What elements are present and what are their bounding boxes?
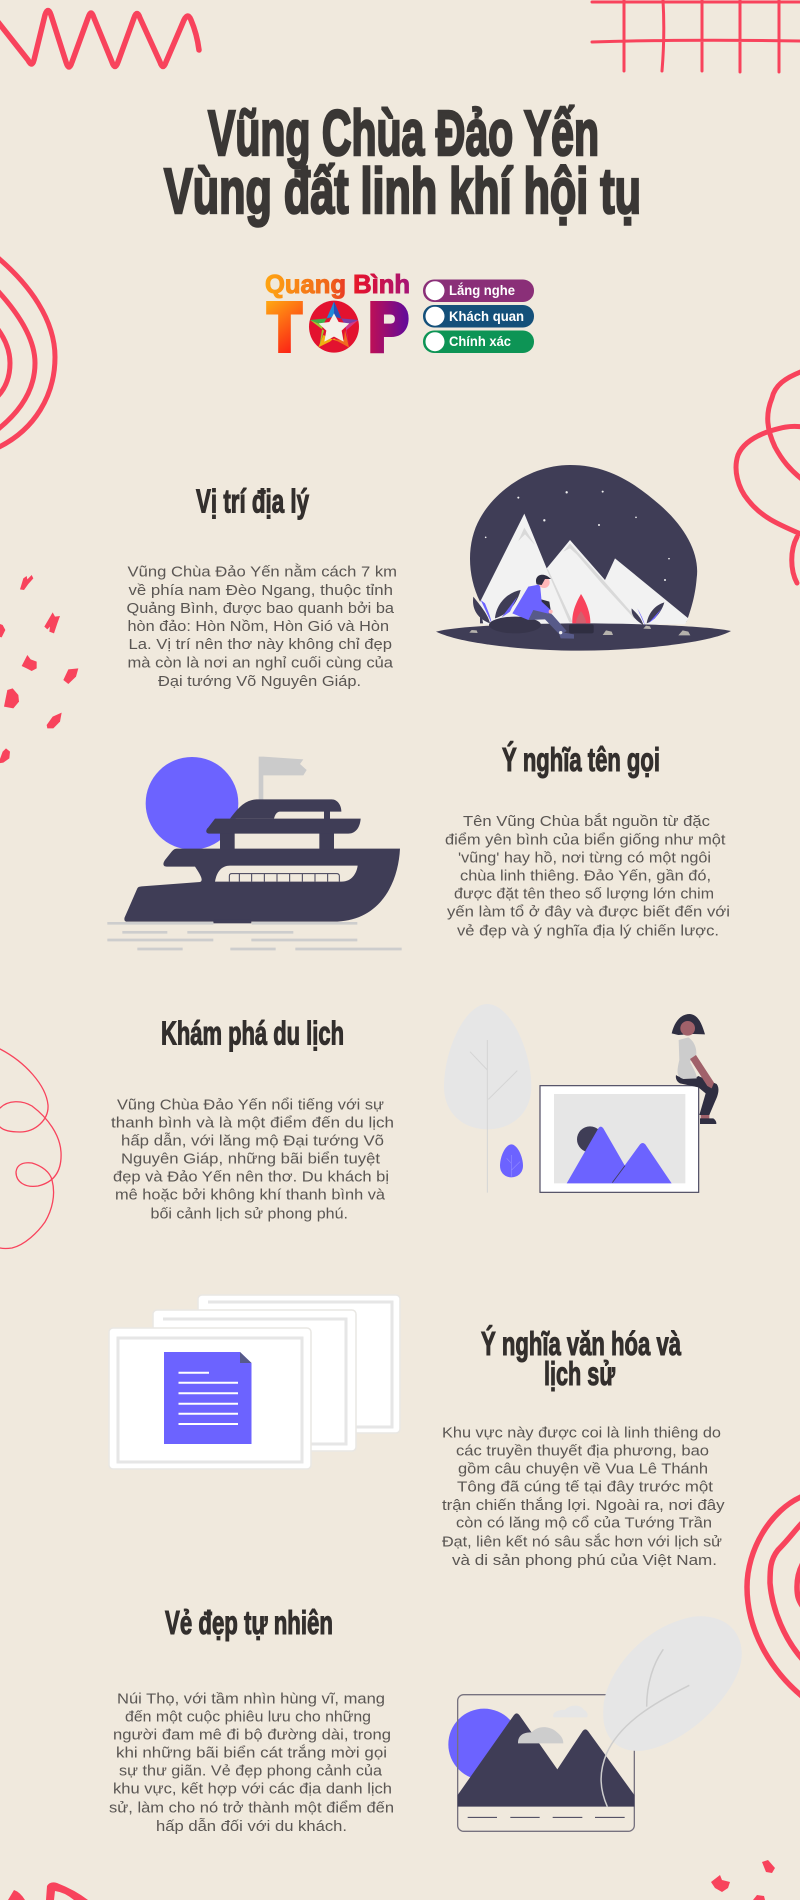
mountains (458, 1713, 634, 1807)
picture mountains (567, 1127, 672, 1183)
text block: Ý nghĩa văn hóa và lịch sử: còn có lăng mộ cổ của Tướng Trần (456, 1515, 712, 1532)
left plants (473, 590, 521, 623)
text block: Ý nghĩa tên gọi: điểm yên bình của biển giống như một (445, 831, 726, 848)
text block: Ý nghĩa văn hóa và lịch sử: Đạt, liên kết nó sâu sắc hơn với lịch sử (442, 1534, 722, 1551)
decoration: left concentric arcs (0, 257, 55, 448)
sun (146, 757, 238, 850)
stars (485, 491, 670, 581)
text block: Ý nghĩa tên gọi: 'vũng' hay hồ, nơi từng có một ngôi (458, 849, 711, 866)
clouds (518, 1727, 563, 1743)
text block: Vị trí địa lý: Đại tướng Võ Nguyên Giáp. (158, 673, 361, 690)
cabin window (215, 866, 358, 882)
text block: Vẻ đẹp tự nhiên: Núi Thọ, với tầm nhìn hùng vĩ, mang (117, 1690, 385, 1707)
illustration: woman sitting on a picture frame (444, 1004, 718, 1193)
decoration: right squiggle (736, 371, 800, 583)
text block: Vị trí địa lý: Quảng Bình, được bao quanh bởi ba (126, 600, 395, 617)
right plants (632, 602, 664, 625)
night sky blob (470, 465, 697, 623)
text block: Khám phá du lịch: Vũng Chùa Đảo Yến nổi tiếng với sự (117, 1096, 384, 1113)
ground (436, 623, 731, 651)
front card (109, 1328, 311, 1469)
mountains (479, 514, 688, 624)
text block: Ý nghĩa văn hóa và lịch sử (442, 1424, 725, 1569)
middle card (153, 1310, 356, 1451)
campfire (569, 594, 594, 633)
heading: Vẻ đẹp tự nhiên: Vẻ đẹp tự nhiên (165, 1604, 333, 1641)
pill: Chính xác (423, 330, 534, 353)
caption dashes (468, 1816, 625, 1819)
icon: rainbow star (309, 301, 359, 353)
decoration: bottom-left arcs (8, 1882, 88, 1900)
picture outline (458, 1695, 634, 1831)
heading: Ý nghĩa văn hóa và lịch sử: Ý nghĩa văn hóa và (481, 1325, 681, 1362)
document icon (164, 1352, 252, 1444)
decoration: bottom-right brush dots (711, 1860, 775, 1900)
text block: Vị trí địa lý: Vũng Chùa Đảo Yến nằm cách 7 km (128, 564, 397, 581)
picture background (554, 1094, 685, 1183)
text block: Khám phá du lịch: hấp dẫn, với lăng mộ Đại tướng Võ (121, 1132, 384, 1149)
text block: Vẻ đẹp tự nhiên: hấp dẫn đối với du khách. (156, 1818, 347, 1835)
logo letters T O P: O (314, 290, 354, 365)
text block: Ý nghĩa văn hóa và lịch sử: gồm câu chuyện về Vua Lê Thánh (458, 1460, 708, 1477)
back card (198, 1295, 400, 1433)
heading: Ý nghĩa tên gọi: Ý nghĩa tên gọi (502, 741, 660, 778)
mountain shading (518, 528, 637, 622)
tree (444, 1004, 531, 1193)
decoration: left thin swirl (0, 1049, 61, 1248)
text block: Vẻ đẹp tự nhiên (109, 1690, 394, 1835)
logo letters T O P: T (268, 290, 301, 365)
illustration: camping under the night sky (436, 465, 731, 651)
pill: Khách quan (423, 305, 534, 328)
text block: Khám phá du lịch: Nguyên Giáp, những bãi biển tuyệt (121, 1151, 381, 1168)
illustration: stacked documents (109, 1295, 400, 1469)
text block: Khám phá du lịch: mê hoặc bởi không khí thanh bình và (115, 1187, 386, 1204)
person (512, 575, 574, 639)
decoration: top-right grid (592, 0, 800, 72)
text block: Ý nghĩa văn hóa và lịch sử: và di sản phong phú của Việt Nam. (452, 1552, 717, 1569)
text block: Vẻ đẹp tự nhiên: đến một cuộc phiêu lưu cho những (125, 1709, 371, 1726)
water lines (107, 923, 402, 949)
pill: Lắng nghe: Lắng nghe (449, 281, 515, 298)
sun (448, 1709, 520, 1780)
text block: Vẻ đẹp tự nhiên: khu vực, kết hợp với các địa danh lịch (113, 1781, 392, 1798)
pill: Chính xác: Chính xác (449, 333, 511, 349)
text block: Ý nghĩa tên gọi: chùa linh thiêng. Đảo Yến, gần đó, (460, 867, 711, 884)
logo wordmark: Quang Bình (265, 269, 410, 299)
text block: Vẻ đẹp tự nhiên: sự thư giãn. Vẻ đẹp phong cảnh của (119, 1763, 383, 1780)
logo: Quang Bình TOP (265, 269, 534, 365)
title (164, 97, 641, 227)
picture moon (577, 1126, 598, 1152)
window railing (229, 874, 339, 882)
text block: Vị trí địa lý: về phía nam Đèo Ngang, thuộc tỉnh (128, 582, 393, 599)
small leaf (500, 1144, 523, 1177)
illustration: landscape picture with leaf (448, 1616, 742, 1831)
heading: Ý nghĩa văn hóa và lịch sử: lịch sử (544, 1355, 615, 1392)
text block: Vị trí địa lý: hòn đảo: Hòn Nồm, Hòn Gió và Hòn (128, 618, 389, 635)
text block: Ý nghĩa tên gọi: được đặt tên theo số lượng lớn chim (454, 885, 714, 902)
decoration: right concentric rings (747, 1496, 800, 1697)
text block: Ý nghĩa văn hóa và lịch sử: Tông đã cúng tế tại đây trước một (457, 1479, 714, 1496)
yacht (124, 799, 400, 923)
text block: Ý nghĩa tên gọi: Tên Vũng Chùa bắt nguồn từ đặc (463, 813, 711, 830)
illustration: yacht with sun (107, 757, 402, 949)
text block: Khám phá du lịch: bối cảnh lịch sử phong phú. (150, 1206, 348, 1223)
decoration: top-left zigzag (0, 10, 199, 67)
flag (259, 757, 307, 800)
text block: Ý nghĩa tên gọi: vẻ đẹp và ý nghĩa địa lý chiến lược. (457, 923, 719, 940)
text block: Vị trí địa lý: mà còn là nơi an nghỉ cuối cùng của (128, 654, 394, 671)
text block: Vẻ đẹp tự nhiên: khi những bãi biển cát trắng mời gọi (116, 1745, 387, 1762)
text block: Ý nghĩa văn hóa và lịch sử: các truyền thuyết địa phương, bao (456, 1442, 709, 1460)
text block: Khám phá du lịch: thanh bình và là một điểm đến du lịch (111, 1114, 394, 1131)
text block: Vẻ đẹp tự nhiên: người đam mê đi bộ đường dài, trong (113, 1727, 391, 1744)
picture frame (540, 1086, 699, 1192)
pill: Lắng nghe (423, 280, 534, 302)
logo letters T O P (268, 290, 408, 365)
heading: Vị trí địa lý: Vị trí địa lý (196, 483, 309, 520)
text block: Ý nghĩa tên gọi (445, 813, 730, 940)
text block: Vị trí địa lý (126, 564, 397, 690)
text block: Ý nghĩa văn hóa và lịch sử: trận chiến thắng lợi. Ngoài ra, nơi đây (442, 1497, 725, 1514)
text block: Vẻ đẹp tự nhiên: sử, làm cho nó trở thành một điểm đến (109, 1800, 394, 1817)
text block: Khám phá du lịch (111, 1096, 394, 1223)
heading: Ý nghĩa văn hóa và lịch sử (481, 1325, 681, 1392)
woman (672, 1014, 718, 1124)
decoration: left brush dots (0, 575, 78, 763)
mountain edge (612, 1166, 625, 1183)
stones (469, 626, 690, 635)
text block: Vị trí địa lý: La. Vị trí nên thơ này không chỉ đẹp (128, 636, 392, 653)
logo letters T O P: P (369, 290, 408, 365)
text block: Ý nghĩa tên gọi: yến làm tổ ở đây và được biết đến với (447, 904, 730, 921)
pill: Khách quan: Khách quan (449, 308, 524, 324)
text block: Khám phá du lịch: đẹp và Đảo Yến nên thơ. Du khách bị (113, 1169, 389, 1186)
text block: Ý nghĩa văn hóa và lịch sử: Khu vực này được coi là linh thiêng do (442, 1424, 721, 1441)
leaf (601, 1616, 742, 1807)
rock (489, 617, 541, 633)
heading: Khám phá du lịch: Khám phá du lịch (161, 1014, 344, 1051)
